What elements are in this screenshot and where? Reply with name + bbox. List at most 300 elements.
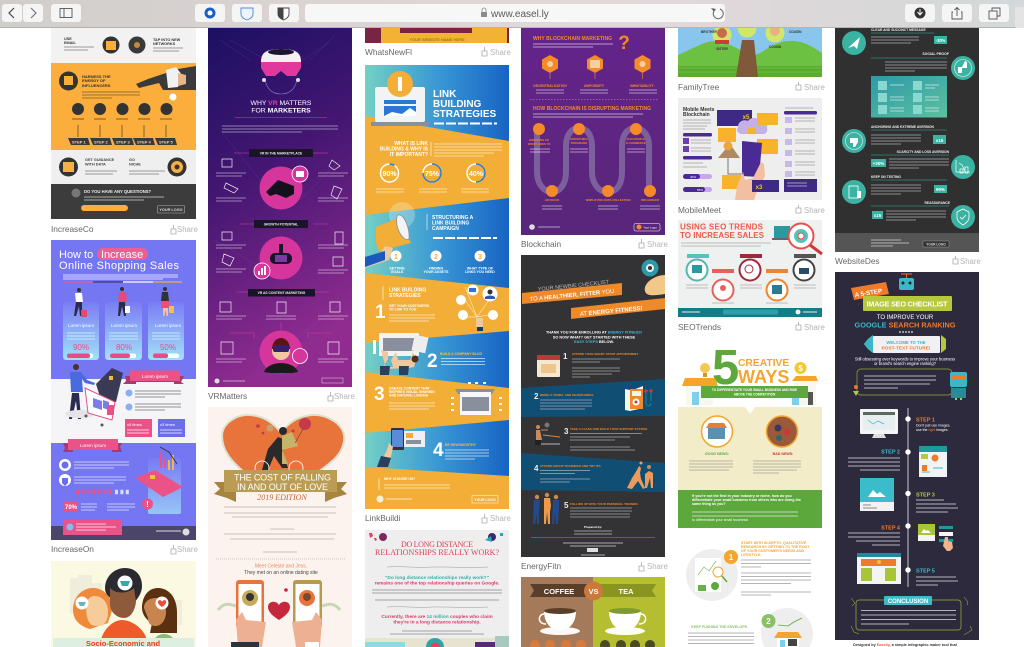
- subtitle banner: [701, 386, 808, 398]
- sidebar button: [51, 4, 81, 22]
- card: family tree bottom: BROTHER: [701, 30, 717, 34]
- lower ribbon: Lorem ipsum: [80, 443, 106, 448]
- checklist title: IMAGE SEO CHECKLIST: [866, 300, 948, 308]
- address bar: www.easel.ly: [490, 9, 549, 20]
- label: IncreaseCo: [51, 224, 198, 234]
- step 5: STEP 5: [916, 568, 935, 574]
- checklist title: TO IMPROVE YOUR: [877, 315, 934, 321]
- label: FamilyTree: [678, 82, 825, 92]
- card: family tree bottom: COUSIN: [789, 30, 802, 34]
- how blockchain heading: HOW BLOCKCHAIN IS DISRUPTING MARKETING: [533, 106, 651, 112]
- strategy 1: LINK BUILDING: [389, 288, 426, 294]
- what is link building: BUILDING & WHY IS: [380, 146, 429, 152]
- psychology items: CLEAR AND SUCCINCT MESSAGE: [871, 28, 926, 32]
- storefronts: [682, 376, 818, 405]
- title and left list: Blockchain: [683, 112, 710, 118]
- milestones: [528, 123, 660, 209]
- section: VR as content marketing: VR AS CONTENT MARKETING: [258, 291, 306, 295]
- VR title: [251, 100, 312, 114]
- title: Increase: [101, 249, 143, 261]
- why choose us: [376, 477, 498, 503]
- title: [375, 540, 499, 557]
- centre phone illustration: x5: [743, 115, 750, 121]
- step bars: STEP 5: [159, 140, 173, 144]
- welcome panel: [864, 335, 946, 353]
- step 2: STEP 2: [881, 450, 900, 456]
- use email section: USE: [64, 37, 72, 41]
- intro question: Still obsessing over keywords to improve your business: [855, 356, 955, 362]
- structuring section: SETTING: [389, 266, 405, 270]
- title and left list: Mobile Meets: [683, 107, 715, 113]
- guidance section: WITH DATA: [85, 162, 106, 166]
- white shopping section: x5 times: [127, 422, 142, 427]
- blockchain footer: [529, 224, 660, 231]
- lower stats: [59, 447, 183, 514]
- label: Blockchain: Share: [647, 240, 668, 249]
- strategy 1 block: [686, 541, 811, 601]
- icon: coffee cup: [539, 608, 580, 635]
- influencers section: HARNESS THE: [82, 74, 111, 79]
- strategy 1: TO LINK TO YOU: [389, 308, 417, 312]
- three percentage columns: Lorem ipsum: [155, 323, 181, 328]
- 5 creative ways title: [700, 341, 806, 395]
- couples stat: they're in a long distance relationship.: [393, 620, 481, 626]
- body lines: [224, 507, 336, 552]
- label: VRMatters: VRMatters: [208, 391, 247, 401]
- card: IncreaseOn infographic: [51, 240, 196, 540]
- questions footer: DO YOU HAVE ANY QUESTIONS?: [84, 189, 152, 194]
- strategy 1 block: LIFESTYLE.: [741, 553, 761, 557]
- title ribbon: [214, 470, 347, 502]
- strategy 2 block: 2: [766, 617, 771, 626]
- heading strips: [522, 279, 665, 319]
- card: VR matters infographic: [208, 28, 352, 387]
- step 4 band: ATTEND GROUP TRAININGS AND TRY-ITS.: [540, 464, 602, 468]
- strategy 3: CREATE CONTENT THAT: [389, 386, 431, 390]
- label: WhatsNewFl: [365, 47, 511, 57]
- aversion items: +30%: [873, 161, 884, 166]
- lower stats: !: [146, 500, 149, 509]
- step 3: 3: [564, 427, 569, 436]
- step 2: [848, 446, 947, 477]
- step 5: [857, 553, 958, 585]
- milestones: AD FRAUD: [545, 198, 559, 202]
- subheading: Meet Celeste and Jess.: [255, 564, 307, 570]
- why blockchain heading: WHY BLOCKCHAIN MARKETING: [533, 36, 612, 42]
- link building title: [433, 89, 497, 124]
- label: VRMatters: [208, 391, 355, 401]
- questions footer: [51, 184, 196, 219]
- title: [59, 248, 182, 282]
- influencers section: ENERGY OF: [82, 78, 106, 83]
- step 5: 5: [564, 501, 569, 510]
- psychology items: [842, 28, 975, 80]
- label: WhatsNewFl: WhatsNewFl: [365, 47, 412, 57]
- hexagon benefits: [533, 55, 657, 93]
- strategy 4: [377, 428, 489, 467]
- hexagon benefits: DECENTRALIZATION: [533, 84, 567, 88]
- label: MobileMeet: MobileMeet: [678, 205, 722, 215]
- subheading: [244, 564, 318, 576]
- strategy 2 block: KEEP PUSHING THE ENVELOPE.: [691, 625, 748, 629]
- section: growth potential: [216, 220, 348, 280]
- intro panel with robot: [853, 369, 967, 400]
- green intro panel: [678, 490, 822, 528]
- label: WebsiteDes: [835, 256, 981, 266]
- structuring section: LINKS YOU NEED: [465, 270, 495, 274]
- strategy 4: BE NEWSWORTHY: [445, 443, 477, 447]
- three percentage columns: Lorem ipsum: [111, 323, 137, 328]
- subtitle banner: TO DIFFERENTIATE YOUR SMALL BUSINESS AND RISE: [712, 388, 797, 392]
- toolbar right buttons: [905, 4, 1024, 28]
- structuring section: 1: [394, 254, 398, 261]
- footer and callout: [51, 520, 196, 540]
- step 4 band: 4: [534, 464, 539, 473]
- milestones: SMOOTHING: [570, 137, 588, 141]
- label: LinkBuildi: [365, 513, 511, 523]
- use email section: EMAIL: [64, 41, 76, 45]
- banner and VS badge: [530, 582, 656, 600]
- quotes: remains one of the top relationship queries on Google.: [375, 580, 499, 586]
- influencers section: INFLUENCERS: [82, 83, 111, 88]
- strategy 1 block: START WITH IN-DEPTH, QUALITATIVE: [741, 541, 807, 545]
- title: How to: [59, 249, 93, 261]
- three percentage columns: 50%: [160, 343, 176, 352]
- label: EnergyFitn: [521, 561, 668, 571]
- step bars: [68, 138, 177, 145]
- good news and bad news: GOOD NEWS:: [705, 452, 729, 456]
- guidance section: GET GUIDANCE: [85, 158, 115, 162]
- label: WebsiteDes: WebsiteDes: [835, 256, 880, 266]
- good news and bad news: BAD NEWS:: [773, 452, 793, 456]
- colourful bottom strip: [365, 636, 509, 647]
- edition subtitle: 2019 EDITION: [257, 493, 307, 502]
- strategy 2: [373, 333, 485, 375]
- 5 creative ways title: 5: [712, 341, 739, 395]
- three percentage columns: 80%: [116, 343, 132, 352]
- card: 5 creative ways infographic: [678, 341, 822, 647]
- thank you intro: EASY STEPS BELOW.: [574, 340, 614, 344]
- structuring section: YOUR ASSETS: [424, 270, 449, 274]
- people heads: [71, 568, 178, 647]
- card: Socio-Economic infographic: [51, 561, 196, 647]
- hexagon benefits: UNIFORMITY: [584, 84, 605, 88]
- VR title: FOR MARKETERS: [251, 108, 311, 114]
- white shopping section: x3 times: [160, 422, 175, 427]
- timeline spine: [905, 408, 911, 587]
- title and left list: [683, 107, 715, 192]
- structuring section: [365, 202, 497, 274]
- centre phone illustration: x3: [756, 185, 763, 191]
- green intro panel: same thing as you?: [692, 502, 726, 506]
- title ribbon: IN AND OUT OF LOVE: [237, 482, 328, 492]
- milestones: INFLUENCER: [641, 198, 659, 202]
- centre phone illustration: [717, 110, 779, 200]
- testing items: REASSURANCE: [925, 201, 951, 205]
- donut stats: 40%: [469, 171, 484, 178]
- step 1: STEP 1: [916, 418, 935, 424]
- label: IncreaseOn: Share: [177, 545, 198, 554]
- 5 creative ways title: WAYS: [738, 367, 789, 387]
- card: image SEO checklist infographic: [835, 272, 979, 640]
- why blockchain heading: [533, 33, 630, 54]
- couples stat: Currently, there are 14 million couples who claim: [381, 614, 493, 620]
- title banner: [53, 638, 194, 647]
- white shopping section: [51, 364, 196, 443]
- strategy 1: STRATEGIES: [389, 293, 421, 299]
- intro question: [855, 356, 955, 366]
- checklist title: A 5-STEP: [854, 288, 883, 299]
- step 3: TAKE A CLASS AND BUILD YOUR SUPPORT SYSTEM.: [570, 427, 648, 431]
- step 1: [537, 352, 639, 377]
- card: energy fitness infographic: [521, 255, 665, 557]
- milestones: SPENT GOES TO: [528, 142, 551, 146]
- step 5: [531, 493, 655, 555]
- section: growth potential: GROWTH POTENTIAL: [264, 222, 298, 226]
- strategy 3: INSPIRES VISUAL SHARING: [389, 390, 435, 394]
- title: DO LONG DISTANCE: [401, 540, 473, 549]
- structuring section: FINDING: [429, 266, 443, 270]
- checklist title: [851, 274, 956, 330]
- strategy 1 block: RESEARCH BY GETTING TO THE ROOT: [741, 545, 810, 549]
- structuring section: 2: [434, 254, 438, 261]
- conclusion: CONCLUSION: [888, 599, 928, 605]
- banner and VS badge: TEA: [618, 587, 634, 596]
- SEO footer: [678, 308, 822, 317]
- strategy 3: 3: [374, 384, 385, 405]
- strategy 2 block: [688, 608, 813, 647]
- step 5: Prepared by:: [584, 525, 602, 529]
- intro question: or brand's search engine ranking?: [874, 361, 937, 366]
- aversion items: ANCHORING AND EXTREME AVERSION: [871, 125, 935, 129]
- VR footer: [214, 378, 343, 384]
- welcome panel: POST-TEXT FUTURE!: [881, 346, 931, 352]
- label: SEOTrends: [678, 322, 825, 332]
- milestones: PROGRAMS: [571, 141, 587, 145]
- green intro panel: differentiate your small business from others who are doing the: [692, 498, 801, 502]
- address bar: [305, 4, 725, 22]
- icon: magnifier over laptop: [772, 224, 822, 254]
- step 3: [860, 478, 958, 512]
- conclusion: [851, 596, 972, 635]
- step 2 band: [521, 379, 665, 417]
- title and left list: 40%: [690, 175, 696, 179]
- donut stats: 90%: [382, 171, 397, 178]
- step 3: STEP 3: [916, 492, 935, 498]
- label: SEOTrends: Share: [804, 323, 825, 332]
- structuring section: 3: [478, 254, 482, 261]
- guidance section: GO: [129, 158, 135, 162]
- step bars: STEP 2: [94, 140, 108, 144]
- testing items: 90%: [936, 187, 945, 192]
- thank you intro: SO NOW WHAT? GET STARTED WITH THESE: [553, 336, 636, 340]
- aversion items: x15: [936, 138, 944, 143]
- card: mobile meets blockchain infographic: [678, 98, 822, 200]
- card: long distance relationships infographic: [365, 530, 509, 647]
- icon: tea cup: [605, 608, 646, 635]
- step 1: 1: [563, 352, 568, 361]
- structuring section: STRUCTURING A: [432, 215, 474, 221]
- browser toolbar: [0, 0, 1024, 28]
- green intro panel: If you're not the first in your industry or niche, how do you: [692, 494, 792, 498]
- title ribbon: THE COST OF FALLING: [234, 472, 331, 482]
- donut stats: [376, 164, 489, 192]
- card: WhatsNewFl bottom edge: [365, 28, 509, 43]
- SEO title: TO INCREASE SALES: [680, 231, 765, 240]
- link building title: BUILDING: [433, 99, 482, 110]
- questions footer: YOUR LOGO: [159, 208, 183, 212]
- strategy 1: GET YOUR CUSTOMERS: [389, 304, 430, 308]
- SEO title: USING SEO TRENDS: [680, 222, 764, 232]
- icon: arm and kettlebell: [642, 260, 665, 295]
- card: cost of love infographic: [208, 407, 352, 647]
- label: WebsiteDes: Share: [960, 257, 981, 266]
- step 3: [535, 422, 648, 450]
- welcome panel: WELCOME TO THE: [886, 340, 926, 345]
- phones and hands: [218, 580, 340, 647]
- banner and VS badge: VS: [588, 587, 599, 596]
- structuring section: CAMPAIGN: [432, 226, 459, 232]
- label: FamilyTree: Share: [804, 83, 825, 92]
- label: MobileMeet: Share: [804, 206, 825, 215]
- how blockchain heading: [533, 106, 651, 117]
- milestones: E-COMMERCE: [626, 141, 646, 145]
- what is link building: IT IMPORTANT?: [390, 152, 428, 158]
- card: family tree bottom: [678, 18, 822, 77]
- psychology items: -30%: [936, 38, 946, 43]
- green intro panel: to differentiate your small business!: [692, 518, 748, 522]
- checklist title: GOOGLE SEARCH RANKING: [855, 320, 956, 330]
- serpentine road: [537, 128, 649, 192]
- step 2 band: 2: [534, 392, 539, 401]
- why choose us: WHY CHOOSE US?: [384, 477, 415, 481]
- label: VRMatters: Share: [334, 392, 355, 401]
- donut stats: 75%: [425, 171, 440, 178]
- process circles: [686, 254, 816, 303]
- label: IncreaseOn: [51, 544, 198, 554]
- what is link building: WHAT IS LINK: [394, 141, 428, 147]
- strategy 3: AND NATURAL LINKING: [389, 394, 429, 398]
- website footer: YOUR LOGO: [926, 242, 946, 246]
- banner and VS badge: COFFEE: [544, 587, 574, 596]
- strategy 3: [374, 383, 502, 415]
- title: Online Shopping Sales: [59, 260, 180, 272]
- why blockchain heading: ?: [618, 33, 630, 54]
- card: SEO trends infographic: [678, 220, 822, 317]
- what is link building: [380, 141, 502, 158]
- link building title: STRATEGIES: [433, 109, 496, 120]
- thank you intro: [546, 330, 642, 344]
- testing items: x15: [874, 213, 882, 218]
- label: FamilyTree: FamilyTree: [678, 82, 720, 92]
- label: IncreaseCo: Share: [177, 225, 198, 234]
- blockchain footer: Your Logo: [643, 226, 657, 230]
- section: VR as content marketing: [216, 289, 348, 374]
- strategy 4: 4: [433, 440, 444, 461]
- SEO title: [680, 222, 771, 246]
- three percentage columns: 90%: [73, 343, 89, 352]
- strategy 2: BUILD A COMPANY BLOG: [440, 352, 483, 356]
- label: Blockchain: [521, 239, 668, 249]
- label: SEOTrends: SEOTrends: [678, 322, 721, 332]
- 5 creative ways title: CREATIVE: [738, 358, 789, 369]
- heading strips: TO A HEALTHIER, FITTER YOU: [530, 289, 615, 303]
- step 1: Don't just use images,: [916, 424, 950, 428]
- three percentage columns: Lorem ipsum: [68, 323, 94, 328]
- label: MobileMeet: [678, 205, 825, 215]
- guidance section: NICHE: [129, 162, 141, 166]
- heading strips: AT ENERGY FITNESS!: [580, 306, 643, 318]
- psychology items: SOCIAL PROOF: [922, 52, 950, 56]
- milestones: ENSURING AD: [529, 138, 549, 142]
- influencers section: [51, 63, 196, 150]
- intro lines: [222, 126, 338, 132]
- card: link building infographic: [365, 65, 509, 509]
- link building title: LINK: [433, 89, 457, 100]
- title and left list: 55%: [697, 188, 703, 192]
- use email section: [64, 36, 183, 54]
- strategy 1 block: OF YOUR CUSTOMER'S NEEDS AND: [741, 549, 804, 553]
- step bars: STEP 4: [137, 140, 151, 144]
- strategy 1: 1: [375, 302, 386, 323]
- label: EnergyFitn: EnergyFitn: [521, 561, 562, 571]
- testing items: [842, 175, 975, 229]
- 5 creative ways title: $: [798, 364, 803, 373]
- website footer: [835, 233, 979, 252]
- thank you intro: THANK YOU FOR ENROLLING AT ENERGY FITNESS!: [546, 330, 642, 334]
- three percentage columns: [63, 302, 184, 360]
- lower ribbon: [63, 439, 122, 452]
- step bars: STEP 3: [116, 140, 130, 144]
- teal statistics panel: [871, 76, 947, 118]
- step 4: STEP 4: [881, 526, 901, 532]
- couples stat: [381, 614, 493, 634]
- title: RELATIONSHIPS REALLY WORK?: [375, 548, 499, 557]
- step 5: FOLLOW UP WITH YOUR PERSONAL TRAINER.: [570, 502, 639, 506]
- card: website design infographic: [835, 28, 979, 252]
- aversion items: SCARCITY AND LOSS AVERSION: [897, 150, 950, 154]
- step 2 band: BRING A TOWEL AND HEADPHONES.: [540, 393, 594, 397]
- VR title: WHY VR MATTERS: [251, 100, 312, 107]
- icon: VR headset: [261, 49, 301, 94]
- card: family tree bottom: SISTER: [716, 47, 728, 51]
- testing items: KEEP ON TESTING: [871, 175, 901, 179]
- step 4: [848, 524, 953, 551]
- label: LinkBuildi: LinkBuildi: [365, 513, 401, 523]
- designed by credit: Designed by Easelly, a simple infographic maker tool that: [853, 643, 958, 647]
- label: WhatsNewFl: Share: [490, 48, 511, 57]
- aversion items: [842, 125, 975, 179]
- card: IncreaseCo infographic: [51, 28, 196, 219]
- subtitle banner: ABOVE THE COMPETITION: [734, 392, 776, 396]
- icon: laptop and chain: [371, 71, 429, 126]
- strategy 1 block: 1: [729, 553, 734, 562]
- quotes: [372, 575, 502, 600]
- lower stats: 70%: [65, 505, 78, 511]
- card: family tree bottom: COUSIN: [769, 45, 782, 49]
- structuring section: GOALS: [391, 270, 404, 274]
- use email section: NETWORKS: [153, 42, 176, 46]
- why choose us: YOUR LOGO: [474, 498, 496, 502]
- guidance section: [51, 151, 196, 184]
- good news and bad news: [678, 407, 822, 490]
- step bars: STEP 1: [72, 140, 86, 144]
- use email section: TAP INTO NEW: [153, 38, 181, 42]
- quotes: "Do long distance relationships really work?": [385, 575, 489, 581]
- milestones: SUCCESSFUL: [627, 137, 646, 141]
- subheading: They met on an online dating site: [244, 570, 318, 576]
- step 1: ATTEND YOUR SMART START APPOINTMENT.: [572, 352, 639, 356]
